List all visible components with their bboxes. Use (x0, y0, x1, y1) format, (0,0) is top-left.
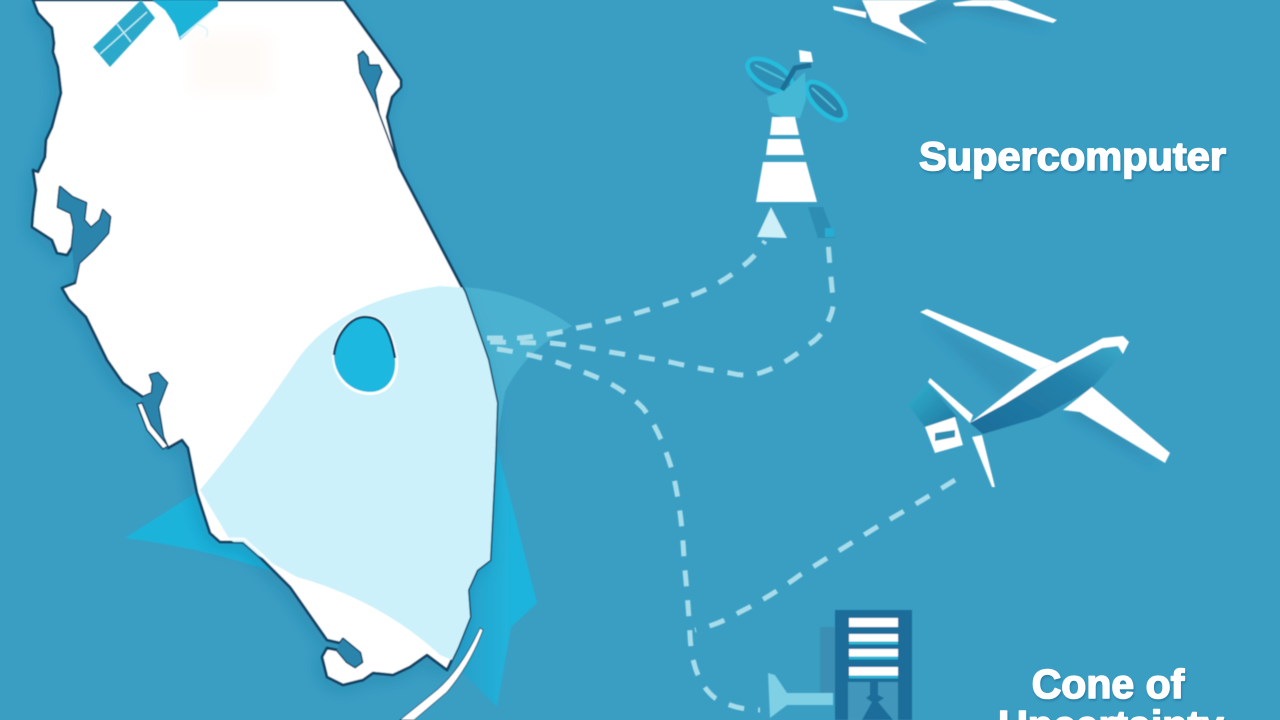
label: Cone of Uncertainty (998, 661, 1224, 720)
map: southern inlet (337, 639, 362, 667)
map: land rim along the southwest coast (212, 531, 297, 590)
tower: upper segment (770, 117, 799, 135)
rack: cast shadow (820, 627, 835, 693)
satellite: body (152, 0, 218, 40)
airplane: tail flag (908, 382, 957, 427)
map: coast shadow (28, 5, 493, 690)
rack: server row one (849, 618, 898, 627)
rack: server row four (849, 667, 898, 677)
rack: stand icon (862, 682, 893, 720)
icon: supercomputer rack (768, 610, 912, 720)
map: lake (334, 317, 395, 392)
tower: left dish ring (742, 52, 798, 98)
airplane: tail panel (925, 417, 963, 453)
path: from airplane (695, 480, 955, 630)
airplane: top wing (920, 309, 1057, 370)
tower: receiver cap (799, 50, 813, 62)
tower: shaded foot (808, 207, 835, 238)
label line one: Cone of (1032, 661, 1185, 707)
map: east lagoon (358, 51, 399, 167)
airplane: fuselage (970, 338, 1129, 434)
cone: bright west wedge (125, 487, 300, 582)
top airplane: right wing (953, 0, 1057, 23)
tower: pale foot (757, 207, 787, 238)
satellite: dish edge (180, 8, 216, 38)
tower: right dish ring (800, 76, 852, 126)
map: west bay (58, 187, 110, 283)
path: looping to tower right side (490, 240, 833, 375)
map: faint tint patch (190, 34, 270, 92)
label: Supercomputer: Supercomputer (919, 135, 1226, 179)
icon: radar tower (742, 50, 852, 238)
airplane: lower fin (972, 435, 995, 487)
florida map (28, 0, 510, 720)
map: south-west inlet (138, 373, 168, 448)
path: to radar tower (487, 241, 765, 338)
map: land mass (32, 0, 497, 685)
rack: funnel connector (768, 673, 833, 718)
airplane: shadow under bottom wing (1065, 400, 1160, 470)
rack: server row two (849, 634, 898, 643)
dashed flight paths (487, 240, 955, 710)
rack: inner panel (848, 682, 898, 720)
satellite: panel grid lines (100, 12, 147, 54)
tower: cyan foot accent (825, 228, 834, 237)
path: down to supercomputer (497, 349, 760, 710)
airplane: shadow under top wing (920, 318, 1030, 400)
top airplane: tail fin (833, 6, 866, 18)
cone of uncertainty: outer projection beyond the coast (125, 287, 572, 707)
tower: hub strut (782, 65, 811, 90)
satellite: solar panel (93, 0, 155, 67)
airplane: tail stabiliser (928, 378, 973, 423)
map: west barrier key (137, 403, 168, 449)
tower: right dish inner line (812, 88, 836, 110)
rack: server row three (849, 649, 898, 658)
icon: large airplane (908, 309, 1170, 487)
icon: satellite (93, 0, 218, 67)
rack: frame (835, 610, 912, 720)
airplane: bottom wing (1063, 387, 1170, 463)
tower: dish hub (767, 72, 806, 118)
rack: row accents (849, 643, 898, 677)
airplane: upper fuselage highlight (970, 336, 1129, 423)
map: lake upper outline (334, 317, 395, 358)
tower: lower segment (756, 162, 817, 202)
top airplane: shadow (845, 0, 1050, 52)
cone: pale upper fan (465, 287, 572, 440)
map: florida keys (400, 628, 483, 720)
airplane: tail panel slit (935, 430, 955, 441)
tower: middle segment (766, 139, 804, 155)
icon: airplane cropped at top (833, 0, 1057, 52)
map: cone of uncertainty over land (200, 286, 510, 680)
tower: dish shadow (743, 56, 807, 108)
map: lake halo (332, 315, 398, 395)
top airplane: fuselage and wing (862, 0, 937, 44)
cone: bright east wedge (455, 450, 537, 707)
tower: left dish inner line (755, 65, 785, 80)
